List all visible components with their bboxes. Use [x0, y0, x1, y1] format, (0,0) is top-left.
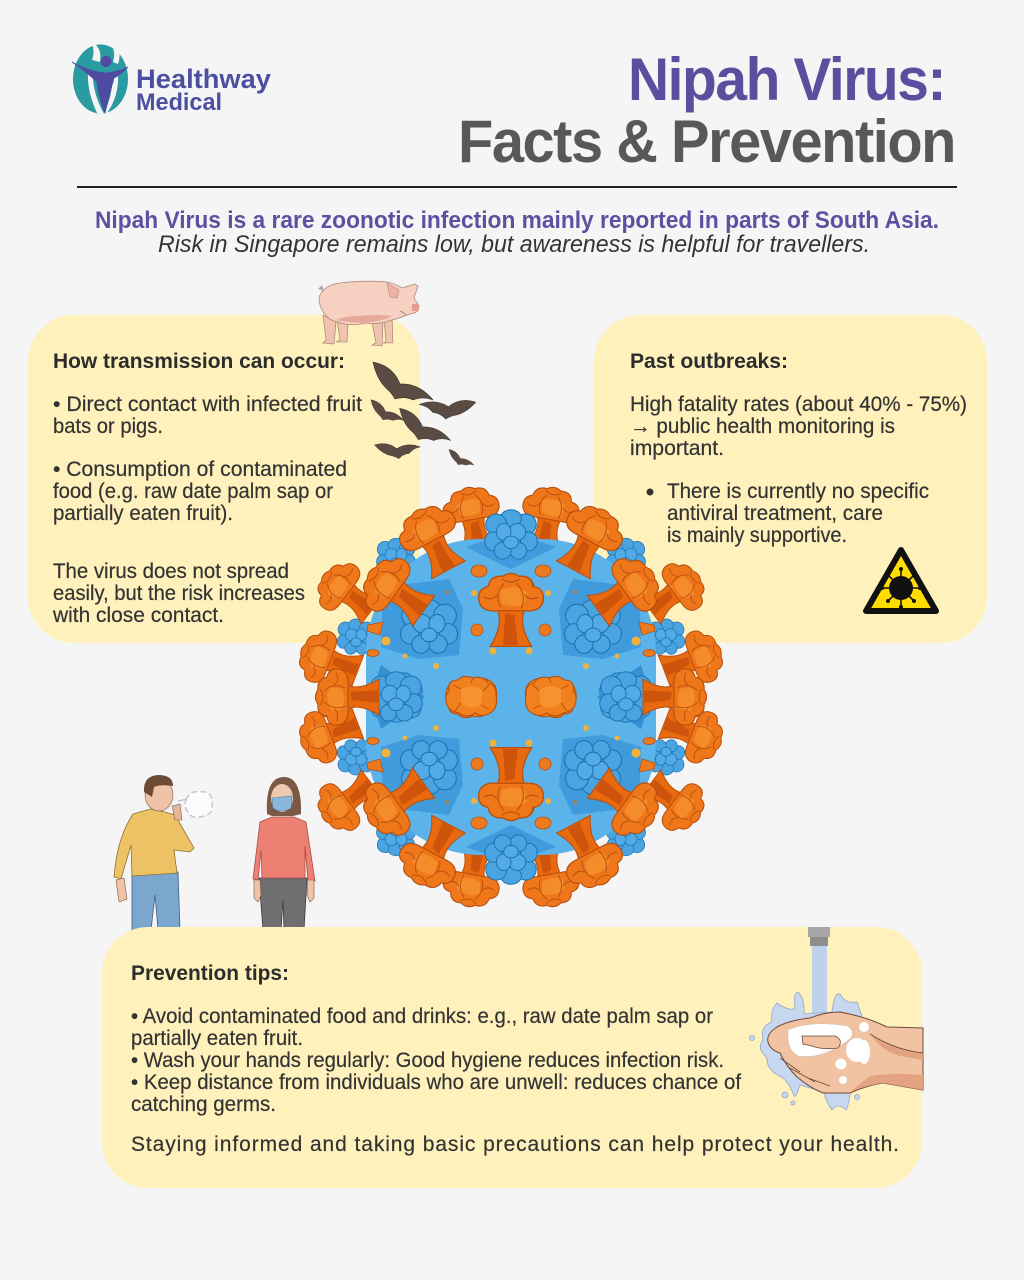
illustration: hand washing: [750, 927, 923, 1110]
text block: fatality rates: important.: [630, 437, 724, 460]
text block: transmission routes: • Direct contact with infected fruit: [53, 393, 362, 416]
text block: fatality rates: → public health monitoring is: [630, 415, 895, 438]
text block: transmission routes: • Consumption of contaminated: [53, 458, 347, 481]
text block: spread note: [52, 560, 305, 627]
text block: no specific treatment: There is currently no specific: [667, 480, 929, 503]
illustration: virus particle: [292, 483, 730, 911]
logo wordmark: Healthway: [136, 64, 271, 94]
title: Nipah Virus:: [628, 46, 945, 113]
text block: tips list: catching germs.: [131, 1093, 276, 1116]
illustration: pig: [318, 281, 419, 346]
text block: tips list: • Avoid contaminated food and drinks: e.g., raw date palm sap or: [131, 1005, 713, 1028]
intro text: [95, 207, 939, 258]
intro text: Nipah Virus is a rare zoonotic infection mainly reported in parts of South Asia.: [95, 207, 939, 234]
logo wordmark: [136, 64, 271, 116]
title: Facts & Prevention: [458, 108, 955, 175]
text block: transmission routes: [53, 393, 362, 525]
text block: transmission routes: food (e.g. raw date palm sap or: [53, 480, 333, 503]
intro text: Risk in Singapore remains low, but awareness is helpful for travellers.: [158, 231, 870, 258]
panel: prevention tips: [102, 927, 923, 1188]
heading: transmission: How transmission can occur:: [53, 350, 345, 373]
panel: how transmission can occur: [28, 315, 420, 643]
text block: fatality rates: [630, 393, 967, 460]
text block: tips list: [131, 1005, 741, 1116]
logo wordmark: Medical: [136, 89, 222, 116]
text block: spread note: The virus does not spread: [53, 560, 289, 583]
icon: biohazard warning triangle: [866, 550, 936, 611]
text block: transmission routes: partially eaten fruit).: [53, 502, 233, 525]
text block: tips list: partially eaten fruit.: [131, 1027, 303, 1050]
text block: spread note: with close contact.: [52, 604, 224, 627]
text block: fatality rates: High fatality rates (about 40% - 75%): [630, 393, 967, 416]
text block: tips list: • Wash your hands regularly: Good hygiene reduces infection risk.: [131, 1049, 724, 1072]
illustration: coughing man: [114, 775, 212, 930]
heading: prevention tips: Prevention tips:: [131, 962, 289, 985]
logo: Healthway Medical: [72, 44, 271, 116]
illustration: fruit bats: [371, 362, 476, 466]
heading: past outbreaks: Past outbreaks:: [630, 350, 788, 373]
illustration: woman with mask: [253, 777, 315, 930]
text block: tips list: • Keep distance from individuals who are unwell: reduces chance of: [131, 1071, 741, 1094]
title: [458, 46, 955, 175]
text block: transmission routes: bats or pigs.: [53, 415, 163, 438]
text block: no specific treatment: is mainly supportive.: [667, 524, 847, 547]
icon: logo figure: [72, 44, 128, 114]
closing statement: Staying informed and taking basic precautions can help protect your health.: [131, 1133, 899, 1156]
text block: no specific treatment: antiviral treatment, care: [667, 502, 883, 525]
text block: spread note: easily, but the risk increases: [53, 582, 305, 605]
panel: past outbreaks: [594, 315, 987, 643]
text block: no specific treatment: [646, 480, 929, 547]
